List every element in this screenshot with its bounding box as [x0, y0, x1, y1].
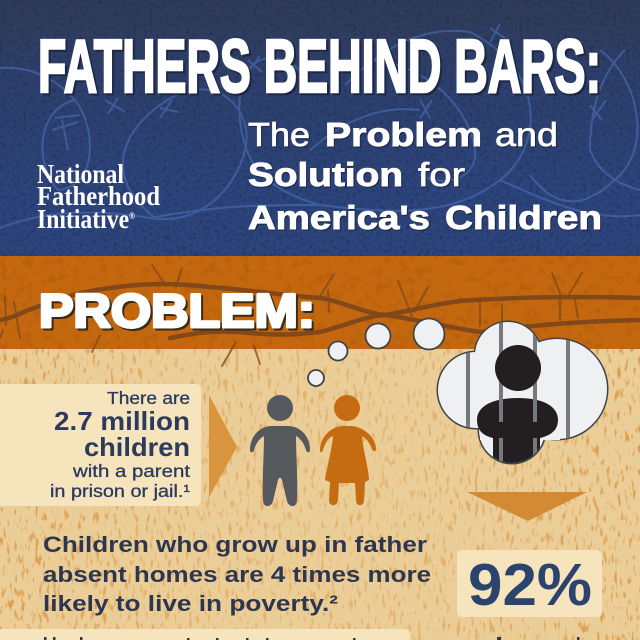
panel: header background [0, 0, 640, 256]
text: father absent homes: likely to live in poverty.² [43, 591, 339, 616]
callout: 2.7 million children: There are [107, 388, 190, 408]
text: father absent homes: absent homes are 4 times more [43, 562, 431, 587]
subtitle [248, 116, 602, 236]
logo: National Fatherhood Initiative: Initiative [37, 204, 142, 234]
logo: National Fatherhood Initiative [37, 159, 160, 234]
subtitle: and [495, 116, 558, 153]
barbed wire: banner pattern [0, 265, 640, 366]
subtitle: The [248, 116, 310, 153]
heading: PROBLEM: PROBLEM: [39, 284, 315, 337]
logo: National Fatherhood Initiative: National [37, 159, 124, 189]
callout: 92 percent: 92% [468, 552, 592, 618]
arrow: down [467, 492, 587, 521]
logo: National Fatherhood Initiative: Fatherhood [37, 181, 160, 211]
arrow: right [209, 395, 237, 497]
subtitle: Children [445, 199, 602, 236]
panel: problem background [0, 349, 640, 640]
callout: 2.7 million children: with a parent [72, 461, 190, 481]
text: father absent homes: Children who grow up in father [43, 532, 427, 557]
panel: problem banner [0, 256, 640, 349]
callout: 2.7 million children: in prison or jail.¹ [50, 481, 190, 501]
icon: girl [320, 395, 376, 505]
subtitle: for [418, 156, 465, 193]
callout: 2.7 million children: 2.7 million [54, 406, 190, 436]
icon: boy [250, 395, 310, 506]
panel: cropped next callout [0, 629, 580, 640]
subtitle: Problem [325, 116, 482, 153]
subtitle: America's [248, 199, 430, 236]
barbed wire: header pattern [0, 24, 640, 228]
thought bubbles [308, 318, 444, 386]
callout: 2.7 million children [0, 384, 201, 506]
text: father absent homes [43, 532, 431, 616]
icon: cloud with parent behind bars [436, 320, 608, 464]
callout: 2.7 million children: children [84, 432, 190, 462]
subtitle: Solution [248, 156, 403, 193]
logo: National Fatherhood Initiative: ® [129, 211, 135, 221]
